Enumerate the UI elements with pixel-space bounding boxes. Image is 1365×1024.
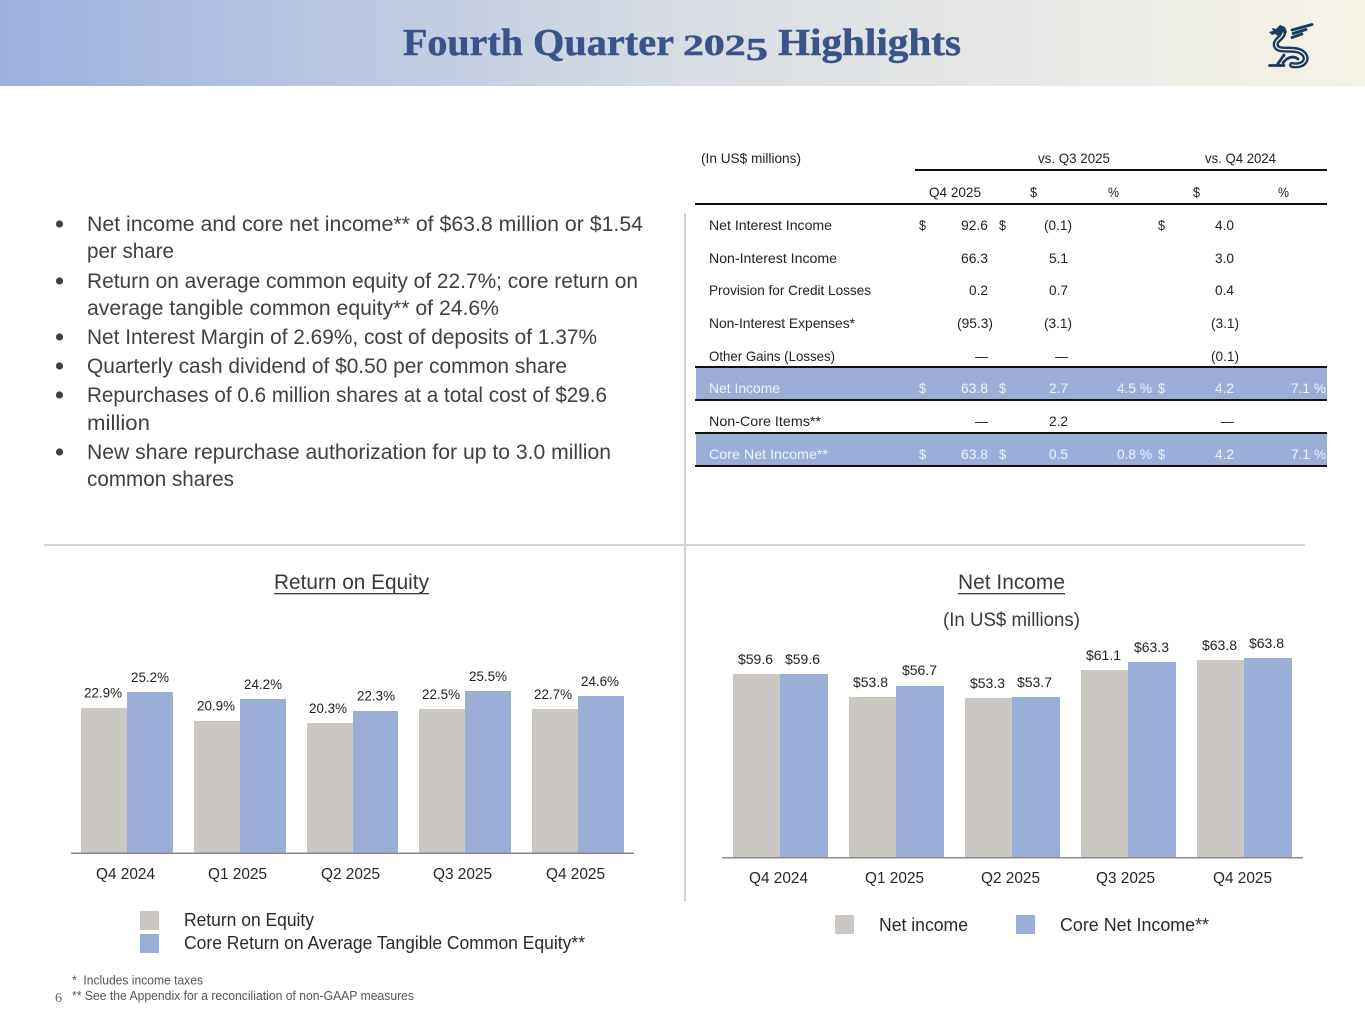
bullet list: common shares xyxy=(87,467,234,491)
bar chart: net income: $63.3 xyxy=(1134,640,1169,655)
table rows: 2.2 xyxy=(1049,414,1068,429)
table rows: $ xyxy=(999,447,1006,462)
table rows: 7.1 % xyxy=(1291,447,1326,462)
bar chart: net income: $59.6 xyxy=(785,652,820,667)
table rows: 4.5 % xyxy=(1117,381,1152,396)
table header: vs. Q4 2024 xyxy=(1205,151,1276,166)
bar chart: return on equity: 22.3% xyxy=(357,688,395,704)
bar chart: return on equity: 20.3% xyxy=(309,701,347,716)
table rows: — xyxy=(975,349,988,364)
bar chart: net income: $61.1 xyxy=(1086,648,1121,663)
table rows: $ xyxy=(919,218,926,233)
header band xyxy=(0,0,1365,86)
table rows: 0.5 xyxy=(1049,447,1068,462)
logo wing xyxy=(1292,24,1312,38)
bullet list: Repurchases of 0.6 million shares at a total cost of $29.6 xyxy=(87,383,607,407)
table rows: (0.1) xyxy=(1211,349,1239,364)
bar chart: return on equity: Q3 2025 xyxy=(433,866,492,883)
table rows: $ xyxy=(1158,447,1165,462)
title: 5 xyxy=(746,31,768,67)
bar chart: net income: Q1 2025 xyxy=(865,870,924,887)
table header: Q4 2025 xyxy=(929,185,981,200)
table rows: 4.0 xyxy=(1215,218,1234,233)
table rows: (95.3) xyxy=(957,316,993,331)
table rows: — xyxy=(1055,349,1068,364)
bullet list: Net income and core net income** of $63.8 million or $1.54 xyxy=(87,212,643,236)
bar chart: net income xyxy=(722,636,1303,887)
bullet list: Return on average common equity of 22.7%; core return on xyxy=(87,269,638,293)
bar chart: return on equity: 25.5% xyxy=(469,669,507,684)
page number: 6 xyxy=(55,991,62,1006)
vertical divider xyxy=(684,213,686,901)
table rows: — xyxy=(1221,414,1234,429)
horizontal divider xyxy=(44,544,1305,546)
title: Fourth xyxy=(403,22,523,64)
heading: Net Income: Net Income xyxy=(958,570,1065,594)
table header: % xyxy=(1108,185,1119,200)
table rows: 4.2 xyxy=(1215,381,1234,396)
bar chart: return on equity xyxy=(71,669,634,883)
financial table xyxy=(695,151,1327,467)
icon: dragon logo xyxy=(1269,24,1312,66)
title: 202 xyxy=(683,29,746,62)
logo head xyxy=(1269,25,1287,38)
table rows: 0.8 % xyxy=(1117,447,1152,462)
bullet list: Quarterly cash dividend of $0.50 per common share xyxy=(87,354,567,378)
table rows: Net Income xyxy=(709,381,780,396)
table rows: Non-Interest Expenses* xyxy=(709,316,856,331)
logo body stripe xyxy=(1276,33,1306,65)
subheading: units: (In US$ millions) xyxy=(943,609,1080,631)
table rows: $ xyxy=(919,447,926,462)
heading: Return on Equity: Return on Equity xyxy=(274,570,429,594)
table rows: (3.1) xyxy=(1211,316,1239,331)
title: Highlights xyxy=(778,22,961,64)
legend: net income: Net income xyxy=(879,915,968,935)
legend: net income: Core Net Income** xyxy=(1060,915,1209,935)
bar chart: net income: $56.7 xyxy=(902,663,937,678)
logo leg and base xyxy=(1270,55,1298,66)
bar chart: return on equity: 22.7% xyxy=(534,687,572,702)
table rows: 63.8 xyxy=(961,381,988,396)
bullet list: million xyxy=(87,411,150,435)
table rows: 0.2 xyxy=(969,283,988,298)
table rows: Net Interest Income xyxy=(709,218,832,233)
table rows: $ xyxy=(1158,381,1165,396)
table rows: (3.1) xyxy=(1044,316,1072,331)
bar chart: return on equity: Q4 2025 xyxy=(546,866,605,883)
table rows: $ xyxy=(999,381,1006,396)
footnotes: * Includes income taxes xyxy=(72,974,203,988)
table header: $ xyxy=(1030,185,1037,200)
table rows: — xyxy=(975,414,988,429)
table rows: 66.3 xyxy=(961,251,988,266)
bar chart: net income: Q2 2025 xyxy=(981,870,1040,887)
table rows xyxy=(709,218,1326,462)
table rows: $ xyxy=(919,381,926,396)
legend: return on equity: Return on Equity xyxy=(184,910,314,930)
table rows: Other Gains (Losses) xyxy=(709,349,835,364)
legend: return on equity xyxy=(140,910,585,953)
bullet list: per share xyxy=(87,239,174,263)
footnotes xyxy=(72,974,414,1003)
bar chart: net income: Q4 2025 xyxy=(1213,870,1272,887)
bar chart: net income: $59.6 xyxy=(738,652,773,667)
bar chart: return on equity: Q1 2025 xyxy=(208,866,267,883)
bar chart: return on equity: 22.9% xyxy=(84,686,122,700)
bar chart: net income: Q4 2024 xyxy=(749,870,808,887)
table rows: 2.7 xyxy=(1049,381,1068,396)
table rows: 4.2 xyxy=(1215,447,1234,462)
bar chart: return on equity: 20.9% xyxy=(197,698,235,714)
bar chart: net income: $63.8 xyxy=(1202,638,1237,653)
bullet list: average tangible common equity** of 24.6% xyxy=(87,296,499,320)
legend: return on equity: Core Return on Average Tangible Common Equity** xyxy=(184,933,585,953)
table rows: 7.1 % xyxy=(1291,381,1326,396)
bar chart: net income: $53.3 xyxy=(970,676,1005,691)
table rows: Provision for Credit Losses xyxy=(709,283,871,298)
bar chart: return on equity: 22.5% xyxy=(422,687,460,702)
table rows: Non-Interest Income xyxy=(709,251,837,266)
bar chart: net income: $53.7 xyxy=(1017,675,1052,690)
bar chart: return on equity: 24.2% xyxy=(244,677,282,692)
bar chart: return on equity: 25.2% xyxy=(131,670,169,685)
table header: vs. Q3 2025 xyxy=(1038,151,1110,166)
table rows: 63.8 xyxy=(961,447,988,462)
table rows: 3.0 xyxy=(1215,251,1234,266)
table header: (In US$ millions) xyxy=(701,151,801,166)
title xyxy=(403,22,961,67)
table header xyxy=(701,151,1289,200)
table rows: 0.4 xyxy=(1215,283,1234,298)
bar chart: net income: Q3 2025 xyxy=(1096,870,1155,887)
logo body xyxy=(1276,33,1306,65)
table header: $ xyxy=(1193,185,1200,200)
table highlight bands xyxy=(695,169,1327,467)
bar chart: net income: $53.8 xyxy=(853,675,888,690)
bar chart: return on equity: 24.6% xyxy=(581,674,619,689)
bar chart: return on equity: Q2 2025 xyxy=(321,866,380,883)
table header: % xyxy=(1278,185,1289,200)
bullet list: New share repurchase authorization for up to 3.0 million xyxy=(87,440,611,464)
legend: net income xyxy=(835,915,1209,935)
footnotes: ** See the Appendix for a reconciliation of non-GAAP measures xyxy=(72,989,414,1003)
table rows: 5.1 xyxy=(1049,251,1068,266)
table rows: $ xyxy=(1158,218,1165,233)
table rows: Core Net Income** xyxy=(709,447,829,462)
bar chart: return on equity: Q4 2024 xyxy=(96,866,155,883)
bar chart: net income: $63.8 xyxy=(1249,636,1284,651)
table rows: 92.6 xyxy=(961,218,988,233)
table rows: Non-Core Items** xyxy=(709,414,822,429)
table rows: (0.1) xyxy=(1044,218,1072,233)
table rows: 0.7 xyxy=(1049,283,1068,298)
table rows: $ xyxy=(999,218,1006,233)
bullet list xyxy=(56,212,643,491)
title: Quarter xyxy=(533,22,674,64)
bullet list: Net Interest Margin of 2.69%, cost of deposits of 1.37% xyxy=(87,325,597,349)
